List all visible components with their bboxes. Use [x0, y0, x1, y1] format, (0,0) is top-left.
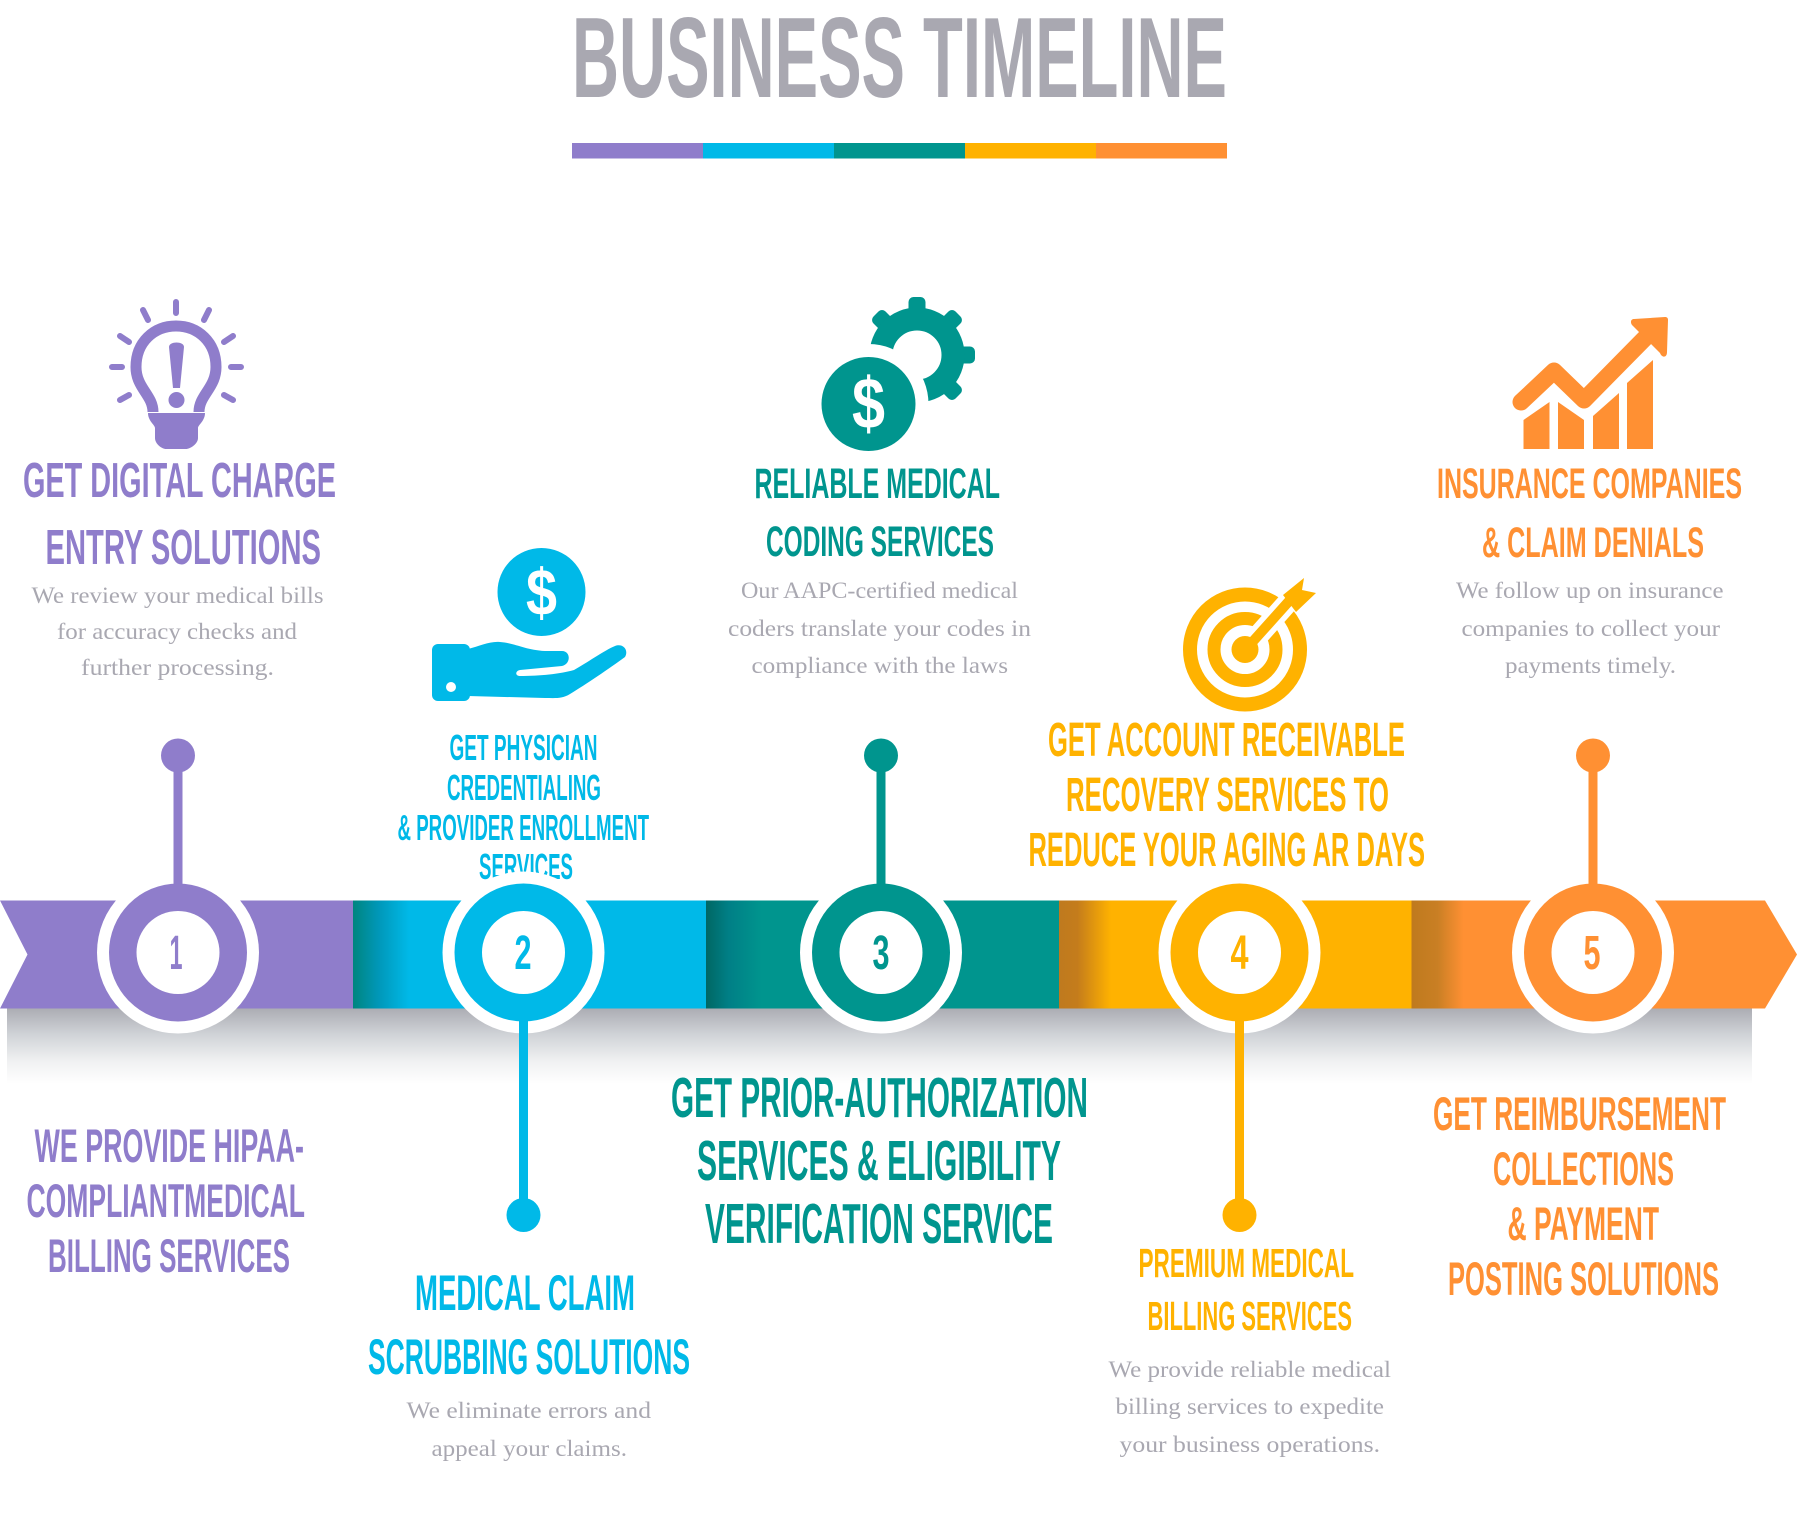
text: premium billing description: We provide reliable medical [1108, 1357, 1391, 1382]
title colour bar [572, 143, 1227, 158]
heading: medical coding: RELIABLE MEDICAL [754, 460, 1000, 508]
heading: reimbursement [1433, 1087, 1726, 1305]
heading: digital charge entry [23, 454, 336, 575]
timeline ribbon [0, 900, 1797, 1008]
marker: number 2: 2 [514, 927, 532, 980]
connector stem over ring: step 3 [876, 865, 886, 886]
icon: gear and dollar coin: $ [852, 364, 885, 444]
heading: reimbursement: & PAYMENT [1508, 1197, 1659, 1250]
heading: prior authorization: SERVICES & ELIGIBILITY [697, 1129, 1061, 1193]
heading: premium billing [1138, 1240, 1354, 1339]
heading: HIPAA billing: COMPLIANTMEDICAL [26, 1174, 305, 1227]
heading: HIPAA billing: BILLING SERVICES [48, 1229, 290, 1282]
heading: digital charge entry: ENTRY SOLUTIONS [46, 521, 321, 575]
panel: step 3 [671, 297, 1088, 1256]
heading: credentialing [398, 727, 649, 887]
text: insurance description: companies to collect your [1462, 616, 1720, 641]
connector: step 5 [1576, 738, 1610, 890]
connector: step 2 [506, 1015, 540, 1232]
heading: premium billing: PREMIUM MEDICAL [1138, 1240, 1354, 1286]
heading: claim scrubbing: SCRUBBING SOLUTIONS [368, 1329, 690, 1385]
icon: target with arrow [1190, 578, 1316, 704]
heading: prior authorization: GET PRIOR-AUTHORIZATION [671, 1066, 1088, 1130]
heading: credentialing: SERVICES [479, 846, 573, 887]
text: claim scrubbing description [406, 1398, 652, 1461]
heading: credentialing: & PROVIDER ENROLLMENT [398, 807, 649, 848]
text: premium billing description [1108, 1357, 1391, 1457]
connector: step 4 [1222, 1015, 1256, 1232]
heading: medical coding: CODING SERVICES [766, 518, 994, 566]
heading: prior authorization: VERIFICATION SERVICE [705, 1192, 1053, 1256]
marker: number 3: 3 [872, 927, 890, 980]
panel: step 2 [368, 548, 690, 1461]
heading: claim scrubbing [368, 1265, 690, 1385]
text: medical coding description: Our AAPC-certified medical [741, 578, 1018, 603]
icon: gear and dollar coin [808, 297, 975, 464]
text: digital charge description [32, 583, 324, 680]
marker: number 1: 1 [170, 927, 182, 980]
text: digital charge description: We review your medical bills [32, 583, 324, 608]
text: premium billing description: billing services to expedite [1116, 1394, 1384, 1419]
marker: number 4: 4 [1230, 927, 1249, 980]
icon: growth chart with arrow [1521, 317, 1668, 449]
heading: account receivable: RECOVERY SERVICES TO [1066, 769, 1389, 822]
panel: step 4 [1028, 578, 1425, 1457]
text: digital charge description: for accuracy checks and [57, 619, 298, 644]
heading: digital charge entry: GET DIGITAL CHARGE [23, 454, 336, 508]
text: medical coding description: coders translate your codes in [728, 616, 1032, 641]
marker: number 2 [442, 872, 604, 1034]
heading: insurance companies [1437, 460, 1742, 567]
marker: number 1 [97, 872, 259, 1034]
heading: medical coding [754, 460, 1000, 566]
heading: prior authorization [671, 1066, 1088, 1256]
heading: account receivable: REDUCE YOUR AGING AR DAYS [1028, 824, 1425, 877]
connector: step 3 [864, 738, 898, 890]
heading: credentialing: CREDENTIALING [447, 767, 601, 808]
marker: number 3 [800, 872, 962, 1034]
marker: number 5: 5 [1584, 927, 1600, 980]
icon: hand with coin [432, 548, 626, 701]
ribbon shadow [7, 1008, 1752, 1084]
heading: account receivable: GET ACCOUNT RECEIVABLE [1048, 714, 1405, 767]
heading: claim scrubbing: MEDICAL CLAIM [415, 1265, 635, 1321]
marker: number 5 [1512, 872, 1674, 1034]
panel: step 5 [1433, 317, 1742, 1305]
heading: account receivable [1028, 714, 1425, 877]
heading: credentialing: GET PHYSICIAN [450, 727, 598, 768]
panel: step 1 [23, 302, 336, 1282]
text: insurance description [1456, 578, 1724, 678]
connector: step 1 [161, 738, 195, 890]
text: medical coding description: compliance with the laws [752, 653, 1008, 678]
connector stem over ring: step 2 [519, 1019, 528, 1039]
text: premium billing description: your business operations. [1120, 1432, 1380, 1457]
connector stem over ring: step 4 [1235, 1019, 1244, 1039]
heading: HIPAA billing [26, 1119, 305, 1282]
marker: number 4 [1158, 872, 1320, 1034]
text: medical coding description [728, 578, 1032, 678]
icon: light bulb [112, 302, 241, 449]
icon: hand with coin: $ [526, 555, 557, 629]
text: claim scrubbing description: appeal your claims. [432, 1436, 627, 1461]
text: insurance description: payments timely. [1505, 653, 1676, 678]
text: claim scrubbing description: We eliminate errors and [406, 1398, 652, 1423]
text: insurance description: We follow up on insurance [1456, 578, 1724, 603]
text: digital charge description: further processing. [81, 655, 274, 680]
connector stem over ring: step 5 [1588, 865, 1598, 886]
heading: HIPAA billing: WE PROVIDE HIPAA- [34, 1119, 304, 1172]
connector stem over ring: step 1 [174, 865, 182, 886]
heading: premium billing: BILLING SERVICES [1148, 1293, 1352, 1339]
